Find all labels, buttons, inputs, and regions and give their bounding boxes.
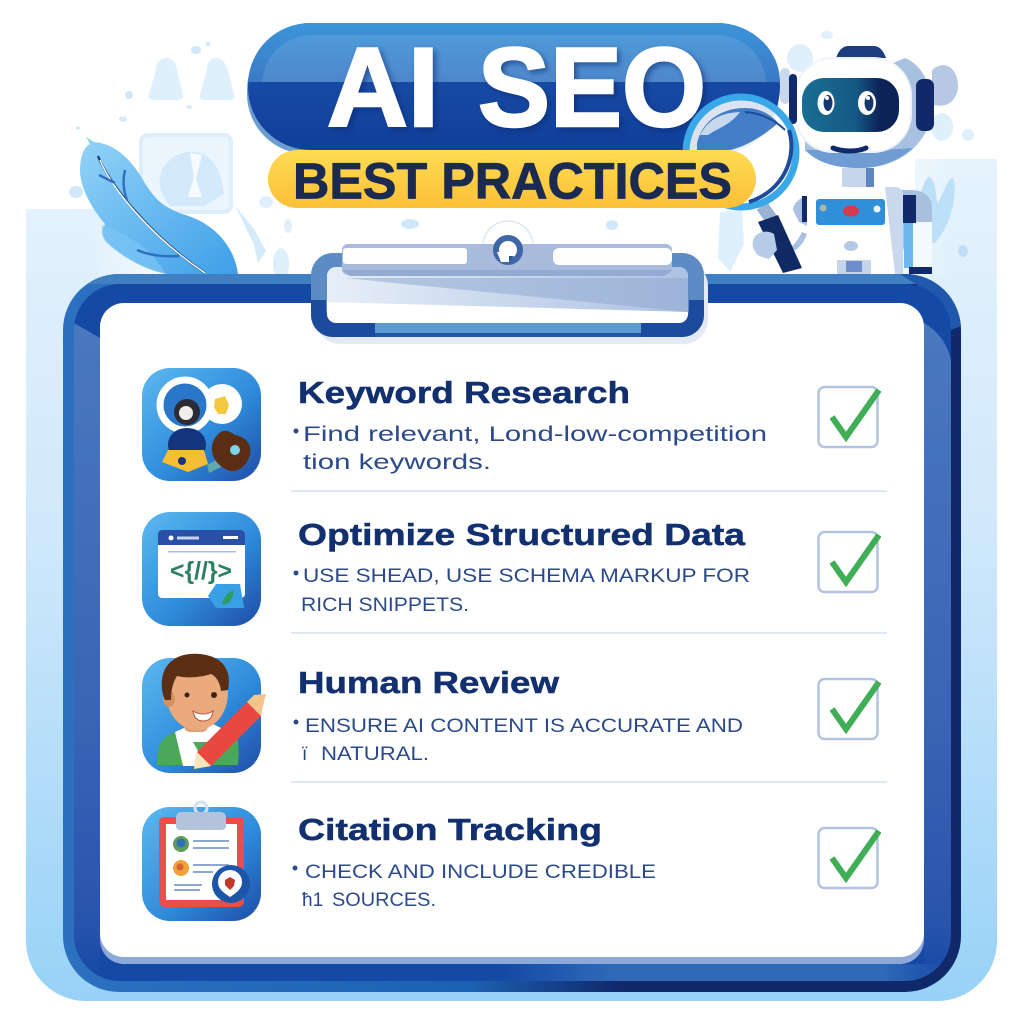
text: human review description: ENSURE AI CONTENT IS ACCURATE AND [305,716,743,737]
robot: ears [780,65,958,131]
row 3: human review [142,654,879,773]
robot: head [795,58,930,168]
title banner [247,23,780,154]
icon: clipboard with sources [142,802,261,921]
robot: belly details [837,241,871,274]
text: keyword research description [294,423,767,474]
icon: leaf [80,137,238,274]
icon: checkbox [818,679,879,739]
robot: chest panel [816,199,885,225]
clip: top bar [342,238,672,276]
robot: torso [807,187,903,274]
background: light blue backdrop [26,150,997,1001]
clip: ring halo [483,221,533,246]
clipboard frame [63,274,961,992]
magnifier: handle [758,206,802,273]
magnifier: hand [753,232,777,259]
robot: right arm [885,190,932,274]
text: citation tracking description: CHECK AND INCLUDE CREDIBLE [305,862,656,883]
text: human review description: ï [302,744,308,765]
icon: checkbox [818,828,879,888]
text: structured data description [294,566,750,616]
banner: main pill [248,23,780,150]
row 4: citation tracking [142,802,879,921]
robot: antenna cap [836,46,886,58]
title: AI SEO [327,25,706,150]
heading: human review: Human Review [298,665,560,700]
clip: soft shadow [316,262,708,344]
robot: smile [833,148,866,151]
icon: checkbox [818,532,879,592]
text: structured data description: RICH SNIPPETS. [301,595,469,616]
text: citation tracking description: ħ1 [302,890,323,911]
row 2: optimize structured data [142,512,879,626]
frame: white sheet [100,303,924,964]
text: human review description: NATURAL. [321,744,429,765]
clipboard clip [311,221,708,344]
robot: visor with eyes [802,78,899,132]
robot: left arm [790,196,807,252]
text: keyword research description: Find relevant, Lond-low-competition [303,423,767,446]
frame: outer shell [63,274,961,992]
robot mascot [780,46,958,274]
row 1: keyword research [142,368,879,481]
magnifier: lens [686,97,796,207]
banner: shadow [247,30,779,154]
decorative pale shapes [69,31,974,280]
heading: keyword research: Keyword Research [298,375,630,410]
subtitle pill [268,150,756,208]
icon: checkbox [818,387,879,447]
icon: keyword research [142,368,261,481]
icon: code window [142,512,261,626]
clip: bracket [311,253,704,337]
text: human review description [294,716,743,765]
title: AI SEO: SEO [478,25,706,150]
icon: magnifying glass [686,97,802,273]
text: citation tracking description [292,862,656,911]
icon: code window: <{//}> [170,557,232,585]
subtitle banner [268,150,756,210]
title: AI SEO: AI [327,25,439,150]
robot: neck [842,168,874,190]
text: citation tracking description: SOURCES. [332,890,436,911]
subtitle text: BEST PRACTICES [293,152,732,210]
text: structured data description: USE SHEAD, USE SCHEMA MARKUP FOR [303,566,750,587]
icon: person with pencil [142,654,266,773]
heading: citation tracking: Citation Tracking [298,812,602,847]
text: keyword research description: tion keywords. [303,451,491,474]
heading: optimize structured data: Optimize Structured Data [298,517,746,552]
